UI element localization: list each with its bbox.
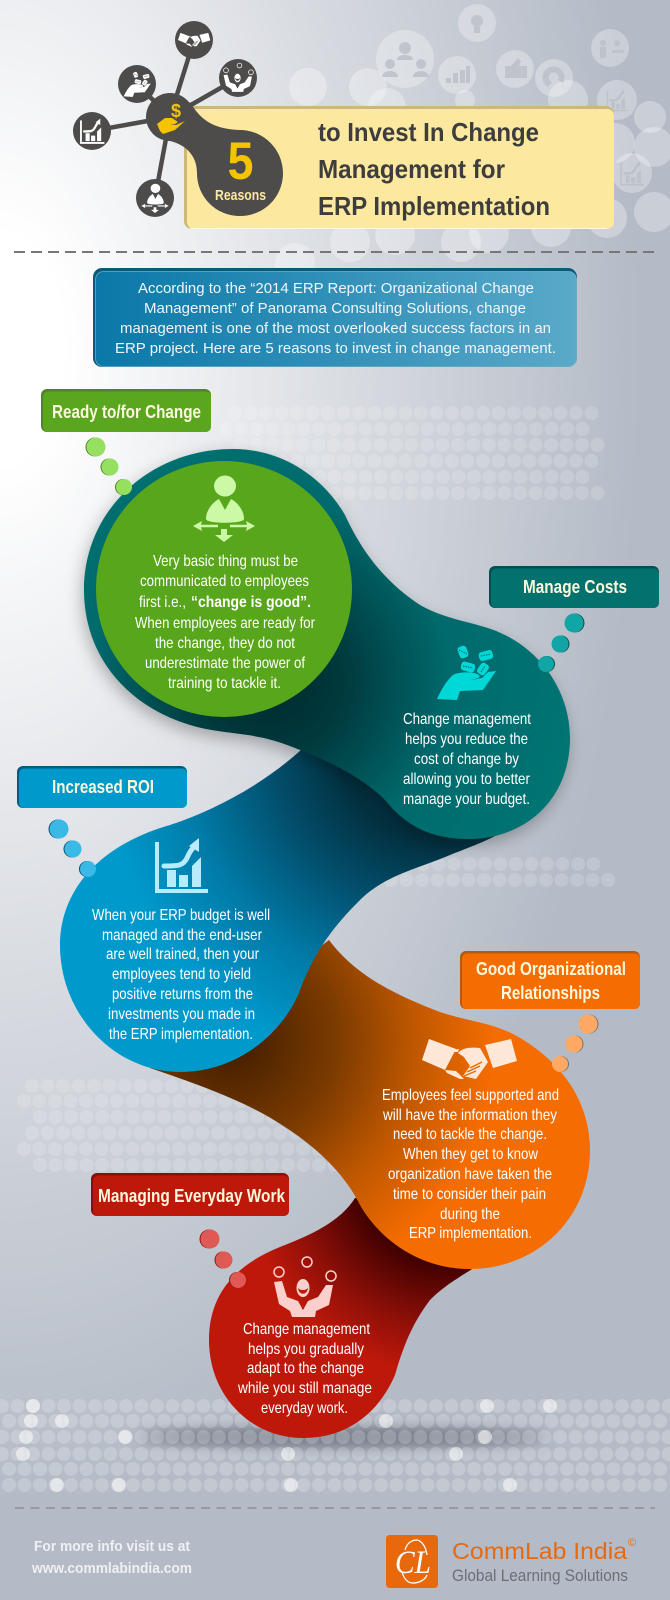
text: good organizational relationships — [382, 1087, 559, 1242]
panel: good organizational relationships blob — [150, 940, 590, 1269]
text: ready for change: When employees are ready for — [135, 615, 316, 632]
text: ready for change: Very basic thing must be — [153, 553, 298, 570]
text: ready for change: communicated to employees — [140, 573, 309, 590]
text: increased ROI: are well trained, then your — [106, 946, 260, 963]
decorative pale icon circles — [275, 4, 670, 283]
dotted texture: bottom — [2, 1406, 670, 1485]
logo: CommLab India: © — [628, 1537, 636, 1549]
footer: website: For more info visit us at — [34, 1538, 190, 1555]
icon: rising chart — [155, 838, 208, 893]
text: manage costs: cost of change by — [414, 751, 519, 768]
heading: to Invest In Change — [318, 117, 539, 147]
panel: increased ROI blob — [60, 750, 505, 1072]
icon circle: chart — [73, 112, 111, 150]
text: increased ROI — [92, 907, 270, 1043]
text: manage costs: allowing you to better — [403, 771, 531, 788]
panel: intro — [93, 268, 577, 367]
text: managing everyday work: Change management — [243, 1321, 370, 1338]
text: ready for change: “change is good”. — [191, 594, 311, 611]
text: managing everyday work: everyday work. — [261, 1400, 348, 1417]
emblem blob: 5 Reasons — [146, 93, 283, 216]
logo: CommLab India — [386, 1535, 636, 1588]
tag: good organizational relationships: Good Organizational — [476, 959, 626, 979]
panel: ready to/for change circle — [96, 461, 352, 717]
text: managing everyday work — [237, 1321, 372, 1417]
text: managing everyday work: while you still manage — [237, 1380, 372, 1397]
header: hub and spoke emblem — [92, 40, 238, 198]
tag: ready to/for change — [41, 389, 211, 432]
tag: managing everyday work: Managing Everyday Work — [98, 1186, 286, 1206]
icon: juggler — [274, 1257, 336, 1317]
tag: ready to/for change: Ready to/for Change — [52, 402, 201, 422]
footer: website — [31, 1538, 192, 1577]
text: good organizational relationships: need to tackle the change. — [393, 1126, 547, 1143]
tag: good organizational relationships — [460, 951, 640, 1009]
text: manage costs: Change management — [403, 711, 531, 728]
tag: increased ROI — [17, 766, 187, 808]
text: good organizational relationships: organization have taken the — [388, 1166, 552, 1183]
text: increased ROI: the ERP implementation. — [109, 1026, 253, 1043]
panel: intro: According to the “2014 ERP Report: Organizational Change — [138, 280, 534, 297]
heading: Management for — [318, 154, 505, 184]
icon: hand holding dollar — [157, 101, 185, 134]
text: manage costs — [403, 711, 531, 808]
icon: hand with coins — [437, 645, 496, 700]
emblem blob: 5 Reasons: Reasons — [215, 187, 266, 204]
ground shadow under chain — [137, 1426, 547, 1448]
tag: good organizational relationships: Relationships — [501, 983, 600, 1003]
text: good organizational relationships: during the — [440, 1206, 500, 1223]
thought bubbles: red — [200, 1230, 246, 1288]
icon: person with arrows — [193, 476, 255, 542]
text: managing everyday work: helps you gradually — [248, 1341, 364, 1358]
text: increased ROI: investments you made in — [108, 1006, 255, 1023]
panel: manage costs blob — [84, 449, 570, 839]
text: ready for change: the change, they do not — [155, 635, 295, 652]
thought bubbles: blue — [48, 820, 96, 877]
heading — [318, 117, 550, 221]
tag: manage costs — [489, 566, 659, 608]
text: good organizational relationships: will have the information they — [382, 1107, 557, 1124]
text: ready for change: first i.e., — [139, 594, 186, 611]
text: ready for change — [135, 553, 316, 692]
panel: intro: ERP project. Here are 5 reasons to invest in change management. — [115, 340, 556, 357]
text: increased ROI: employees tend to yield — [112, 966, 251, 983]
tag: increased ROI: Increased ROI — [52, 777, 154, 797]
panel: managing everyday work blob — [209, 1198, 472, 1438]
thought bubbles: orange — [552, 1014, 598, 1072]
text: increased ROI: managed and the end-user — [102, 927, 263, 944]
icon circle: juggler — [219, 59, 257, 97]
icon circle: person — [136, 179, 174, 217]
heading: ERP Implementation — [318, 191, 550, 221]
logo: CommLab India: CommLab India — [452, 1538, 627, 1564]
thought bubbles: teal — [538, 614, 584, 672]
dotted texture: upper right — [24, 413, 615, 1165]
footer: website: www.commlabindia.com — [31, 1560, 192, 1577]
text: ready for change: underestimate the power of — [145, 655, 305, 672]
icon circle: coins — [118, 65, 156, 103]
icon: hand holding dollar: $ — [171, 101, 181, 121]
logo: CommLab India: Global Learning Solutions — [452, 1567, 628, 1585]
text: managing everyday work: adapt to the change — [247, 1360, 364, 1377]
text: good organizational relationships: Employees feel supported and — [382, 1087, 559, 1104]
text: good organizational relationships: time to consider their pain — [393, 1186, 546, 1203]
emblem blob: 5 Reasons: 5 — [228, 132, 254, 191]
panel: intro: management is one of the most overlooked success factors in an — [120, 320, 551, 337]
logo: CommLab India: CL — [395, 1545, 431, 1581]
text: good organizational relationships: ERP implementation. — [409, 1225, 532, 1242]
thought bubbles: green — [86, 438, 132, 495]
icon: handshake — [422, 1039, 517, 1079]
text: manage costs: manage your budget. — [403, 791, 530, 808]
tag: managing everyday work — [91, 1173, 289, 1216]
text: increased ROI: When your ERP budget is well — [92, 907, 270, 924]
text: ready for change: training to tackle it. — [168, 675, 281, 692]
panel: intro: Management” of Panorama Consulting Solutions, change — [144, 300, 526, 317]
text: manage costs: helps you reduce the — [405, 731, 528, 748]
text: increased ROI: positive returns from the — [112, 986, 253, 1003]
title banner — [184, 106, 614, 229]
tag: manage costs: Manage Costs — [523, 577, 627, 597]
text: good organizational relationships: When they get to know — [403, 1146, 538, 1163]
icon circle: handshake — [175, 21, 213, 59]
